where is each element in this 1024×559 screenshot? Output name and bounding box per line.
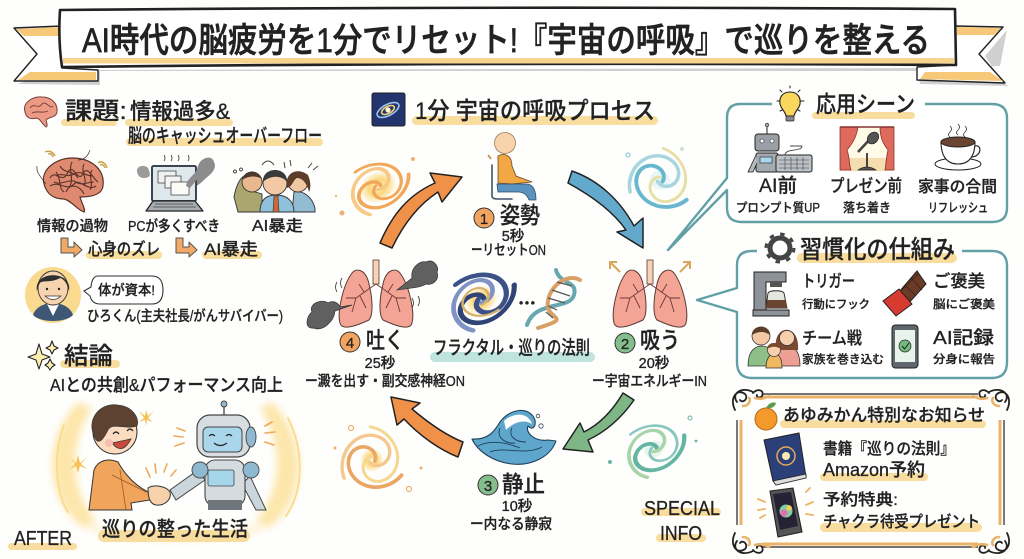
icon: phone wallpaper: [758, 488, 813, 537]
step 1 label: 5秒: [502, 228, 525, 245]
label: AI log: 分身に報告: [933, 352, 995, 366]
icon: brain: [25, 97, 57, 127]
arrow: orange to step 1: [380, 173, 462, 248]
label: AI log: [933, 328, 995, 366]
label: trigger: [802, 272, 870, 311]
panel: conclusion: [8, 341, 300, 550]
arrow: orange to step 4: [391, 397, 463, 457]
after label: orderly life: 巡りの整った生活: [102, 518, 248, 541]
icon: curtain and microphone: [840, 127, 894, 171]
label: team battle: [802, 329, 884, 366]
speech bubble: [84, 276, 163, 304]
arrow: to AI runaway: [176, 238, 197, 257]
scene: between chores: 家事の合間: [918, 178, 997, 196]
icon: galaxy tile: [372, 93, 405, 126]
scene: between chores: [918, 178, 997, 215]
icon: book: [764, 433, 806, 485]
step 2 label: 吸う: [640, 327, 680, 353]
arrow: to mind-body gap: [61, 238, 82, 257]
step 2 label: ー宇宙エネルギーIN: [592, 373, 707, 390]
process heading: 1分 宇宙の呼吸プロセス: [415, 98, 655, 125]
icon: light bulb: [777, 86, 804, 121]
step 2 label: 2: [621, 336, 629, 353]
icon: gear: [766, 234, 794, 262]
icon: robot and keyboard: [748, 123, 812, 172]
step 1 label: [471, 202, 546, 259]
issue heading: 課題:: [65, 98, 127, 125]
book text: [820, 440, 955, 481]
spiral: orange bottom: [324, 408, 422, 503]
label: reward: 脳にご褒美: [933, 297, 996, 311]
notice heading: あゆみかん特別なお知らせ: [783, 406, 985, 425]
preorder bonus text: [820, 491, 982, 532]
icon: inhale lungs: [610, 260, 690, 327]
icon: family: [748, 327, 800, 368]
arrow: green to step 3: [563, 393, 634, 452]
step 3 label: [470, 471, 552, 533]
icon: panicked people: [234, 160, 318, 212]
arrow: blue to step 2: [568, 171, 643, 248]
label: team battle: 家族を巻き込む: [802, 352, 884, 366]
conclusion heading: 結論: [64, 343, 113, 370]
icon: sparkles: [28, 341, 58, 370]
issue heading: 脳のキャッシュオーバーフロー: [128, 125, 322, 147]
label: special info: INFO: [660, 523, 702, 545]
step 1 label: 1: [480, 211, 488, 228]
icon: overloaded brain: [37, 150, 107, 212]
icon: avatar: [25, 267, 81, 323]
icon: smoking laptop: [137, 155, 215, 211]
step 1 label: 姿勢: [500, 202, 540, 228]
callout box: [668, 104, 1007, 250]
preorder bonus text: チャクラ待受プレゼント: [823, 512, 980, 531]
title banner: [14, 8, 1009, 86]
presenter name: ひろくん(主夫社長/がんサバイバー): [87, 307, 283, 325]
step 4 label: 吐く: [366, 327, 404, 353]
icon: coffee machine: [753, 272, 789, 316]
panel: breathing process: [305, 93, 721, 545]
step 2 label: [592, 327, 707, 390]
preorder bonus text: 予約特典:: [823, 491, 898, 509]
dots: •••: [519, 296, 535, 310]
presenter: [25, 267, 283, 325]
panel: special notice: [733, 390, 1009, 553]
panel: use scenes: [668, 86, 1007, 250]
step 4 label: [305, 327, 465, 390]
step 3 label: 3: [484, 478, 492, 495]
scene: before AI: AI前: [759, 175, 797, 197]
label: AI runaway: AI暴走: [204, 240, 258, 259]
label: fractal law: フラクタル・巡りの法則: [433, 337, 590, 359]
icon: coffee cup: [935, 124, 981, 170]
label: reward: [933, 272, 996, 311]
panel: habit mechanism: [697, 234, 1007, 378]
scene: before presentation: [830, 176, 902, 215]
scene: before AI: [736, 175, 820, 215]
label: fractal law: [430, 337, 595, 362]
spiral: teal: [610, 126, 709, 225]
label: reward: ご褒美: [933, 272, 985, 291]
label: special info: SPECIAL: [644, 498, 720, 520]
step 4 label: 25秒: [365, 355, 396, 372]
label: special info: [641, 498, 721, 545]
illustration: handshake with robot: [52, 401, 300, 541]
caption: information overload: 情報の過物: [37, 218, 108, 235]
book text: Amazon予約: [823, 460, 925, 480]
issue heading: [61, 98, 323, 147]
icon: exhale lungs: [307, 260, 438, 329]
panel: issue: [25, 97, 323, 259]
callout box: [697, 251, 1007, 378]
label: AI log: AI記録: [933, 328, 994, 348]
icon: chocolate: [883, 271, 926, 316]
ornamental frame: [733, 390, 1009, 553]
issue heading: 情報過多&: [130, 99, 230, 124]
step 2 label: 20秒: [639, 355, 670, 372]
label: trigger: トリガー: [802, 272, 855, 291]
step 4 label: 4: [346, 335, 354, 352]
scene: before presentation: 落ち着き: [843, 200, 891, 215]
habit heading: 習慣化の仕組み: [800, 236, 955, 264]
caption: PC: PCが多くすべき: [128, 217, 220, 235]
use scenes heading: 応用シーン: [816, 91, 915, 117]
scene: between chores: リフレッシュ: [928, 201, 988, 215]
speech bubble: 体が資本!: [98, 282, 155, 298]
spiral: orange top: [328, 143, 420, 229]
conclusion subtitle: AIとの共創&パフォーマンス向上: [50, 375, 283, 395]
icon: seated person: [488, 132, 536, 200]
icon: DNA: [527, 270, 580, 328]
icon: phone with check: [892, 325, 918, 368]
scene: before presentation: プレゼン前: [830, 176, 902, 196]
spiral: green: [604, 403, 697, 492]
label: AFTER: AFTER: [14, 528, 72, 550]
icon: central galaxy: [426, 251, 527, 346]
label: team battle: チーム戦: [802, 329, 862, 348]
label: trigger: 行動にフック: [802, 297, 870, 311]
step 3 label: ー内なる静寂: [470, 515, 552, 533]
step 4 label: ー澱を出す・副交感神経ON: [305, 372, 465, 390]
step 3 label: 静止: [502, 471, 545, 497]
step 1 label: ーリセットON: [471, 243, 546, 259]
icon: orange: [755, 403, 777, 430]
scene: before AI: プロンプト質UP: [736, 200, 820, 215]
step 3 label: 10秒: [502, 498, 533, 515]
book text: 書籍『巡りの法則』: [823, 440, 955, 458]
label: mind-body gap: 心身のズレ: [88, 239, 160, 259]
caption: AI runaway: AI暴走: [252, 217, 303, 235]
icon: wave: [472, 410, 556, 464]
